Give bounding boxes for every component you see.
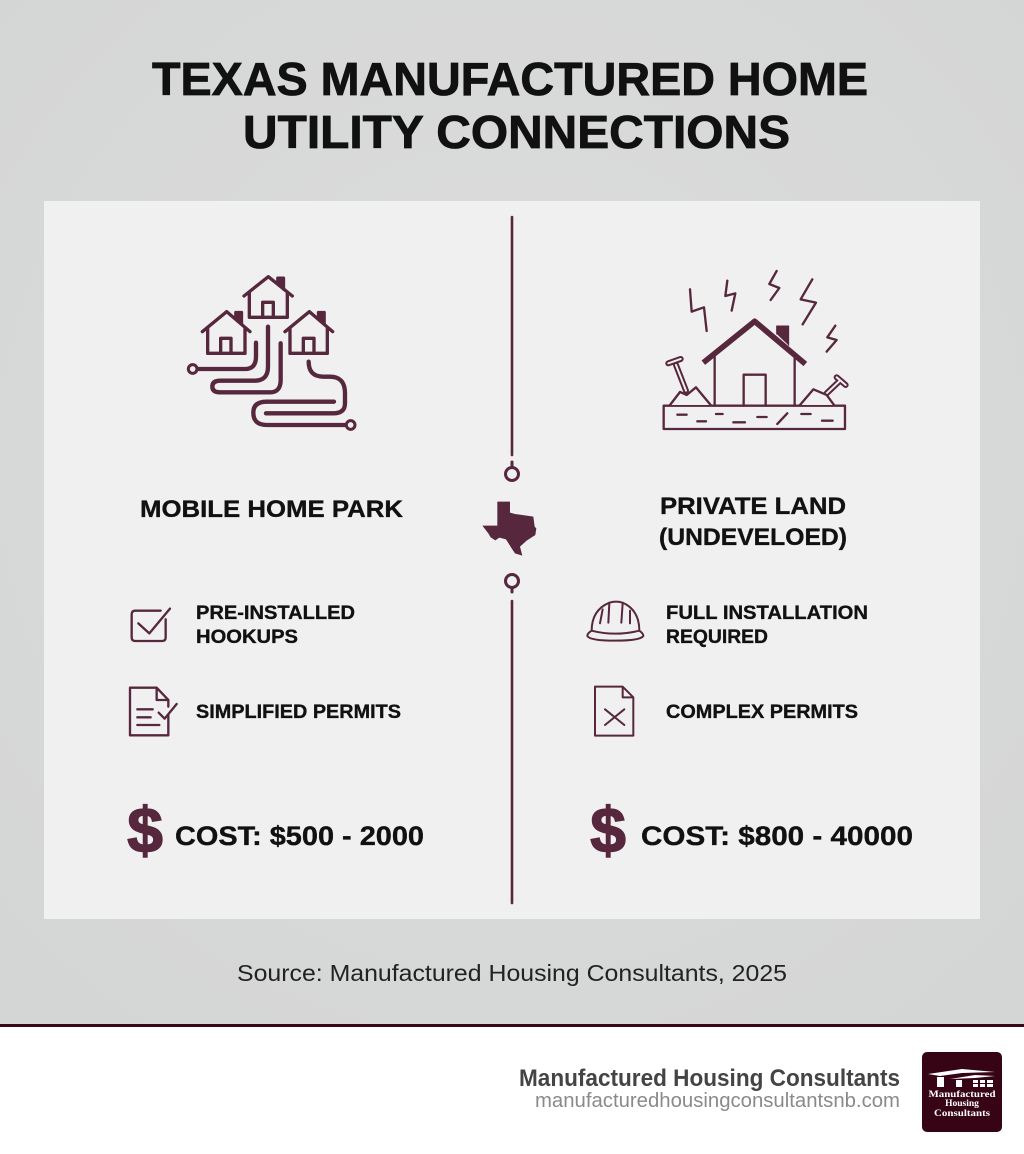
cost: private land: COST: $800 - 40000 [641, 821, 913, 851]
item: full installation required: FULL INSTALLATION [666, 602, 868, 624]
title [152, 53, 868, 158]
item: complex permits: COMPLEX PERMITS [666, 701, 858, 723]
brand name: Manufactured Housing Consultants [519, 1065, 900, 1092]
icon: dollar sign: $ [127, 794, 163, 866]
icon: checkbox [132, 609, 170, 641]
lower node [506, 574, 518, 592]
upper node [506, 462, 518, 480]
item: simplified permits: SIMPLIFIED PERMITS [196, 701, 401, 723]
heading: private land: (UNDEVELOED) [659, 524, 847, 551]
heading: private land [659, 493, 847, 551]
panel: comparison [44, 201, 980, 919]
logo: Housing [945, 1099, 979, 1109]
icon: hard hat [587, 602, 643, 641]
logo [922, 1052, 1002, 1132]
source line: Source: Manufactured Housing Consultants, 2025 [237, 960, 787, 986]
logo: Consultants [934, 1109, 990, 1119]
divider with Texas emblem [482, 217, 536, 903]
cost: park: COST: $500 - 2000 [175, 821, 424, 851]
heading: mobile home park: MOBILE HOME PARK [140, 496, 404, 523]
icon: Texas [482, 502, 536, 556]
heading: private land: PRIVATE LAND [660, 493, 846, 520]
icon: house on undeveloped land [664, 271, 846, 429]
item: pre-installed hookups: HOOKUPS [196, 626, 298, 648]
website: manufacturedhousingconsultantsnb.com [535, 1090, 900, 1112]
footer [0, 1024, 1024, 1154]
item: simplified permits [130, 688, 401, 735]
icon: dollar sign: $ [590, 794, 626, 866]
cost: park [127, 794, 424, 866]
logo: Manufactured [928, 1090, 996, 1100]
item: complex permits [595, 687, 858, 736]
title: UTILITY CONNECTIONS [243, 106, 790, 158]
cost: private land [590, 794, 913, 866]
item: full installation required: REQUIRED [666, 626, 768, 648]
item: pre-installed hookups [132, 602, 355, 648]
item: full installation required [587, 602, 868, 648]
title: TEXAS MANUFACTURED HOME [152, 53, 868, 105]
icon: document with check [130, 688, 177, 735]
icon: park houses with utility pipes [188, 277, 355, 429]
item: pre-installed hookups: PRE-INSTALLED [196, 602, 355, 624]
icon: document with X [595, 687, 633, 736]
